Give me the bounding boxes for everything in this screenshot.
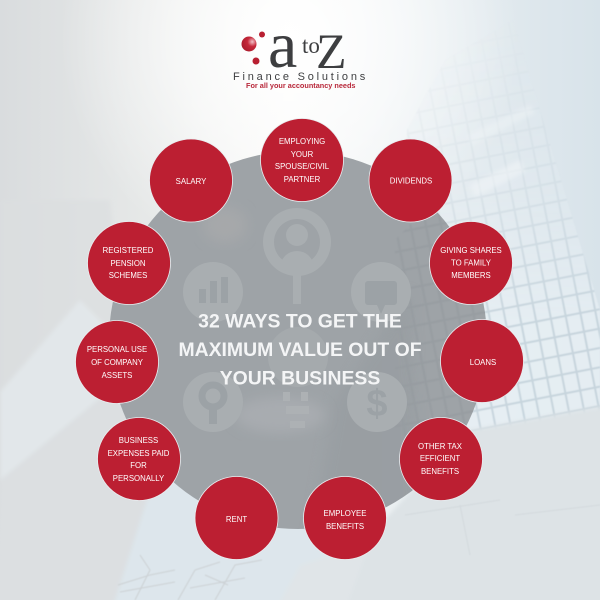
node: giving shares to family members	[430, 222, 512, 304]
node: giving shares to family members: GIVING SHARES	[440, 246, 502, 255]
icon: lower centre bars	[283, 392, 309, 428]
node: other tax efficient benefits: OTHER TAX	[418, 442, 463, 451]
title: YOUR BUSINESS	[220, 368, 380, 390]
node: employee benefits: EMPLOYEE	[324, 509, 366, 518]
icon: speech bubble	[351, 262, 411, 322]
node: giving shares to family members: TO FAMILY	[451, 258, 492, 268]
node: salary	[150, 139, 232, 222]
node: employee benefits: BENEFITS	[326, 522, 364, 531]
icon: dollar: $	[366, 383, 388, 425]
node: employing your spouse/civil partner: SPOUSE/CIVIL	[275, 162, 330, 171]
node: employing your spouse/civil partner: YOUR	[291, 150, 314, 159]
icon: key	[183, 372, 243, 432]
node: business expenses paid for personally	[98, 418, 180, 500]
icon: bar chart	[183, 262, 243, 322]
icon: centre coin	[268, 327, 328, 387]
node: dividends: DIVIDENDS	[390, 176, 432, 186]
logo tagline: For all your accountancy needs	[246, 81, 356, 90]
node: personal use of company assets: PERSONAL USE	[87, 345, 147, 354]
node: dividends	[369, 139, 452, 222]
central grey circle	[109, 151, 500, 540]
node: business expenses paid for personally: PERSONALLY	[113, 474, 165, 483]
node: loans	[440, 320, 524, 402]
node: registered pension schemes: SCHEMES	[109, 271, 147, 280]
node: other tax efficient benefits: EFFICIENT	[420, 454, 460, 463]
node: employee benefits	[304, 476, 386, 560]
logo wordmark: a	[268, 9, 297, 82]
icon: magnifier with person	[263, 208, 331, 304]
node: rent	[195, 476, 278, 560]
node: other tax efficient benefits	[400, 418, 482, 500]
node: rent: RENT	[226, 515, 247, 524]
logo	[233, 9, 368, 90]
node: registered pension schemes: REGISTERED	[103, 246, 154, 255]
node: employing your spouse/civil partner: PARTNER	[284, 175, 321, 184]
logo: to	[302, 33, 320, 58]
node: registered pension schemes	[88, 222, 170, 304]
node: employing your spouse/civil partner	[260, 118, 344, 202]
node: business expenses paid for personally: FOR	[130, 461, 147, 470]
node: business expenses paid for personally: EXPENSES PAID	[108, 449, 170, 458]
title	[178, 310, 422, 390]
node: other tax efficient benefits: BENEFITS	[421, 467, 459, 476]
node: personal use of company assets: OF COMPANY	[91, 358, 144, 367]
node: loans: LOANS	[470, 358, 496, 367]
icon: dollar	[347, 372, 407, 432]
logo name: Finance Solutions	[233, 71, 368, 83]
title: 32 WAYS TO GET THE	[198, 310, 402, 332]
title: MAXIMUM VALUE OUT OF	[178, 339, 422, 361]
node: business expenses paid for personally: BUSINESS	[119, 436, 158, 445]
node: registered pension schemes: PENSION	[110, 259, 146, 268]
logo: Z	[316, 23, 347, 79]
node: giving shares to family members: MEMBERS	[451, 271, 491, 280]
node: personal use of company assets: ASSETS	[102, 371, 132, 380]
node: employing your spouse/civil partner: EMPLOYING	[279, 137, 325, 146]
node: salary: SALARY	[176, 177, 207, 186]
node: personal use of company assets	[76, 320, 158, 404]
logo icon: red dots	[242, 32, 265, 64]
